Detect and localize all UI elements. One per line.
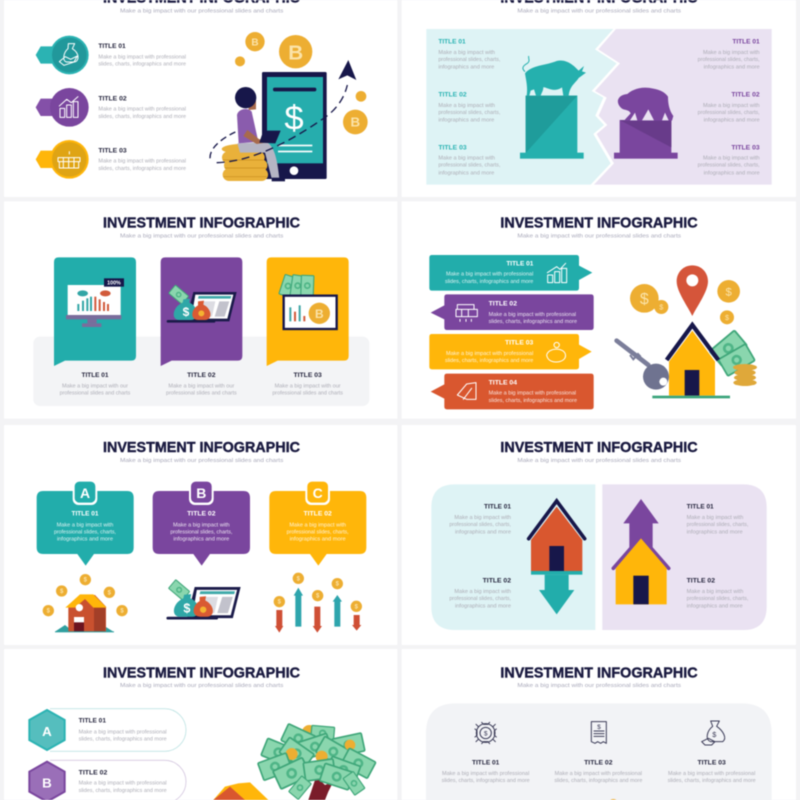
title: INVESTMENT INFOGRAPHIC xyxy=(103,664,300,681)
down text xyxy=(449,504,511,610)
column 3: money bag icon: TITLE 03 xyxy=(697,759,726,766)
column 2: receipt icon: Make a big impact with professional xyxy=(555,771,642,777)
item 2: Make a big impact with professional xyxy=(98,107,186,113)
card B: infographics and more xyxy=(173,537,229,543)
left text: professional slides, charts, xyxy=(438,163,500,169)
column 2: receipt icon: TITLE 02 xyxy=(584,759,613,766)
illustration: house, key, pin, coins: $ xyxy=(640,291,649,308)
column 3: money bag icon: slides, charts, infographics and more xyxy=(668,778,756,784)
right text xyxy=(698,39,760,177)
right text: TITLE 01 xyxy=(732,39,760,46)
card B: professional slides, charts, xyxy=(170,529,232,535)
panel: down side xyxy=(431,484,595,630)
column 3: money bag icon: Make a big impact with professional xyxy=(668,771,755,777)
slide: hexagons and money tree xyxy=(4,649,397,800)
item 3: Make a big impact with professional xyxy=(98,159,186,165)
subtitle: Make a big impact with our professional slides and charts xyxy=(517,9,681,15)
item 1: slides, charts, infographics and more xyxy=(98,62,186,68)
illustration: up and down arrows with coins: $ xyxy=(336,582,340,588)
down text: Make a big impact with xyxy=(454,589,511,595)
title: INVESTMENT INFOGRAPHIC xyxy=(103,439,300,456)
up text xyxy=(687,504,748,610)
illustration: up and down arrows with coins: $ xyxy=(316,594,320,600)
item B: slides, charts, infographics and more xyxy=(79,788,167,794)
up text: professional slides, charts, xyxy=(687,596,748,602)
illustration: house, key, pin, coins: $ xyxy=(725,313,729,322)
caption 1: professional slides and charts xyxy=(60,391,131,397)
item A: TITLE 01 xyxy=(79,718,106,725)
subtitle: Make a big impact with our professional slides and charts xyxy=(517,458,681,464)
column 1: gear icon: TITLE 01 xyxy=(472,759,500,766)
down text: infographics and more xyxy=(455,530,511,536)
illustration: house with coins: $ xyxy=(47,609,51,615)
house with up arrow xyxy=(613,499,669,604)
banner 3: TITLE 03 xyxy=(505,340,534,347)
banner 1 xyxy=(429,255,592,291)
banner 3 xyxy=(429,334,592,369)
illustration: up and down arrows with coins xyxy=(274,573,362,633)
bull column xyxy=(520,56,586,159)
slide: person with bitcoin phone xyxy=(4,0,397,197)
slide: houses up and down xyxy=(402,425,796,645)
slide: three speech bubbles xyxy=(4,201,397,419)
grey panel xyxy=(426,703,772,800)
slide: A B C cards xyxy=(4,425,397,645)
item A xyxy=(29,709,186,751)
up text: infographics and more xyxy=(687,604,743,610)
illustration: house, key, pin, coins xyxy=(617,265,757,398)
title: INVESTMENT INFOGRAPHIC xyxy=(500,215,698,232)
right text: infographics and more xyxy=(704,65,760,71)
banner 4 xyxy=(431,374,594,409)
illustration: house with coins xyxy=(43,574,128,632)
down text: infographics and more xyxy=(455,604,511,610)
subtitle: Make a big impact with our professional slides and charts xyxy=(120,683,284,689)
down text: professional slides, charts, xyxy=(449,522,511,528)
illustration: house with coins: $ xyxy=(120,609,124,615)
caption 2: Make a big impact with our xyxy=(168,383,235,389)
bear column xyxy=(614,88,678,159)
left text: infographics and more xyxy=(438,118,494,124)
up text: TITLE 02 xyxy=(687,578,715,585)
right text: professional slides, charts, xyxy=(698,57,760,63)
bubble 1 with monitor: 100% xyxy=(107,280,121,286)
column 2: receipt icon: $ xyxy=(597,724,601,731)
right text: Make a big impact with xyxy=(703,103,760,109)
card A xyxy=(37,482,134,566)
illustration: phone, person and coins: B xyxy=(288,41,303,64)
left text: TITLE 02 xyxy=(438,91,467,98)
left text: infographics and more xyxy=(438,171,494,177)
illustration: house, key, pin, coins: $ xyxy=(726,286,733,298)
card C: Make a big impact with xyxy=(289,522,346,528)
right text: professional slides, charts, xyxy=(698,110,760,116)
banner 2: TITLE 02 xyxy=(489,300,517,307)
item A: Make a big impact with professional xyxy=(79,729,167,735)
item 1: TITLE 01 xyxy=(98,43,126,50)
right text: professional slides, charts, xyxy=(698,163,760,169)
bubble 3 with wallet xyxy=(267,257,349,366)
card C: professional slides, charts, xyxy=(287,529,349,535)
clipped coin at bottom edge xyxy=(608,799,619,800)
panel: bull side xyxy=(426,29,617,185)
item B: Make a big impact with professional xyxy=(79,781,167,787)
subtitle: Make a big impact with our professional slides and charts xyxy=(120,234,284,240)
left text: professional slides, charts, xyxy=(438,110,500,116)
card A: A xyxy=(80,485,90,501)
item B: TITLE 02 xyxy=(79,769,108,776)
banner 2 xyxy=(431,294,594,330)
down text: professional slides, charts, xyxy=(449,596,511,602)
right text: infographics and more xyxy=(704,171,760,177)
banner 4: slides, charts, infographics and more xyxy=(489,398,577,404)
illustration: phone, person and coins: B xyxy=(351,115,361,130)
banner 2: Make a big impact with professional xyxy=(489,312,576,318)
title: INVESTMENT INFOGRAPHIC xyxy=(103,215,300,232)
illustration: house, key, pin, coins: $ xyxy=(659,303,663,312)
left text: Make a big impact with xyxy=(438,50,495,56)
up text: infographics and more xyxy=(687,530,743,536)
bubble 3 with wallet: B xyxy=(315,307,324,321)
banner 4: Make a big impact with professional xyxy=(489,391,576,397)
illustration: phone, person and coins: B xyxy=(251,37,259,48)
illustration: up and down arrows with coins: $ xyxy=(278,600,282,606)
column 1: gear icon: slides, charts, infographics and more xyxy=(442,778,530,784)
item B: B xyxy=(42,776,52,791)
banner 1: Make a big impact with professional xyxy=(446,272,533,278)
up text: Make a big impact with xyxy=(687,589,743,595)
item 3: TITLE 03 xyxy=(98,147,127,154)
right text: TITLE 02 xyxy=(731,91,760,98)
illustration: house with coins: $ xyxy=(60,589,64,595)
illustration: phone, person and coins xyxy=(210,32,368,181)
up text: professional slides, charts, xyxy=(687,522,748,528)
item 2: TITLE 02 xyxy=(98,95,127,102)
card A: infographics and more xyxy=(57,537,113,543)
card B: Make a big impact with xyxy=(173,522,230,528)
right text: Make a big impact with xyxy=(703,50,760,56)
column 3: money bag icon xyxy=(668,721,756,784)
illustration: money tree and house xyxy=(213,724,376,800)
subtitle: Make a big impact with our professional slides and charts xyxy=(120,458,284,464)
item 2 xyxy=(36,88,186,127)
bubble 2 with laptop and money bags xyxy=(161,257,242,366)
item A: slides, charts, infographics and more xyxy=(79,737,167,743)
right text: Make a big impact with xyxy=(703,156,760,162)
banner 1: TITLE 01 xyxy=(506,261,534,268)
caption 2: TITLE 02 xyxy=(187,372,216,379)
down text: Make a big impact with xyxy=(454,515,511,521)
caption 1 xyxy=(60,372,131,397)
banner 3: Make a big impact with professional xyxy=(446,351,533,357)
left text: TITLE 01 xyxy=(438,39,466,46)
caption 3 xyxy=(272,372,343,397)
slide: bull vs bear xyxy=(402,0,796,197)
item 1 xyxy=(36,36,186,74)
slide: line icons panel xyxy=(402,649,796,800)
item B xyxy=(29,760,186,800)
down text: TITLE 02 xyxy=(483,578,511,585)
left text: professional slides, charts, xyxy=(438,57,500,63)
left text: Make a big impact with xyxy=(438,156,495,162)
column 3: money bag icon: $ xyxy=(712,730,716,739)
up text: Make a big impact with xyxy=(687,515,743,521)
left text xyxy=(438,39,500,177)
grey band xyxy=(33,337,369,406)
card A: Make a big impact with xyxy=(57,522,113,528)
house with down arrow xyxy=(529,501,585,614)
title: INVESTMENT INFOGRAPHIC xyxy=(500,664,698,681)
left text: infographics and more xyxy=(438,65,494,71)
item 1: Make a big impact with professional xyxy=(98,54,186,60)
illustration: house with coins: $ xyxy=(84,578,88,584)
banner 1: slides, charts, infographics and more xyxy=(445,279,533,285)
left text: Make a big impact with xyxy=(438,103,495,109)
bubble 1 with monitor xyxy=(54,257,136,366)
card A: TITLE 01 xyxy=(71,511,99,518)
illustration: phone, person and coins: $ xyxy=(284,99,304,137)
subtitle: Make a big impact with our professional slides and charts xyxy=(120,9,284,15)
subtitle: Make a big impact with our professional slides and charts xyxy=(517,683,681,689)
right text: TITLE 03 xyxy=(731,144,760,151)
illustration: house with coins: $ xyxy=(108,590,112,596)
down text: TITLE 01 xyxy=(484,504,511,511)
caption 1: TITLE 01 xyxy=(81,372,109,379)
banner 3: slides, charts, infographics and more xyxy=(445,358,533,364)
card C: C xyxy=(313,485,323,501)
column 1: gear icon xyxy=(442,722,530,784)
card B xyxy=(153,482,250,566)
item 2: slides, charts, infographics and more xyxy=(98,114,186,120)
slide: four arrow banners xyxy=(402,201,796,419)
illustration: laptop and money bags xyxy=(166,580,241,620)
caption 3: Make a big impact with our xyxy=(275,383,341,389)
item 3 xyxy=(36,140,186,179)
banner 4: TITLE 04 xyxy=(489,379,517,386)
illustration: up and down arrows with coins: $ xyxy=(355,604,359,610)
subtitle: Make a big impact with our professional slides and charts xyxy=(517,234,681,240)
illustration: up and down arrows with coins: $ xyxy=(297,576,301,582)
column 1: gear icon: Make a big impact with professional xyxy=(442,771,529,777)
caption 1: Make a big impact with our xyxy=(62,383,128,389)
card C: infographics and more xyxy=(290,537,346,543)
title: INVESTMENT INFOGRAPHIC xyxy=(500,439,698,456)
card A: professional slides, charts, xyxy=(54,529,116,535)
caption 3: professional slides and charts xyxy=(272,391,343,397)
column 1: gear icon: $ xyxy=(484,730,488,737)
up text: TITLE 01 xyxy=(687,504,714,511)
panel: bear side xyxy=(594,29,772,185)
caption 3: TITLE 03 xyxy=(293,372,322,379)
column 2: receipt icon: slides, charts, infographics and more xyxy=(554,778,642,784)
column 2: receipt icon xyxy=(554,722,642,784)
card B: B xyxy=(196,485,206,501)
right text: infographics and more xyxy=(704,118,760,124)
caption 2: professional slides and charts xyxy=(166,391,237,397)
item 3: slides, charts, infographics and more xyxy=(98,166,186,172)
card C: TITLE 02 xyxy=(303,511,332,518)
banner 2: slides, charts, infographics and more xyxy=(489,319,577,325)
panel: up side xyxy=(602,484,767,630)
card B: TITLE 02 xyxy=(187,511,216,518)
item A: A xyxy=(42,724,52,739)
caption 2 xyxy=(166,372,237,397)
left text: TITLE 03 xyxy=(438,144,467,151)
card C xyxy=(269,482,366,566)
